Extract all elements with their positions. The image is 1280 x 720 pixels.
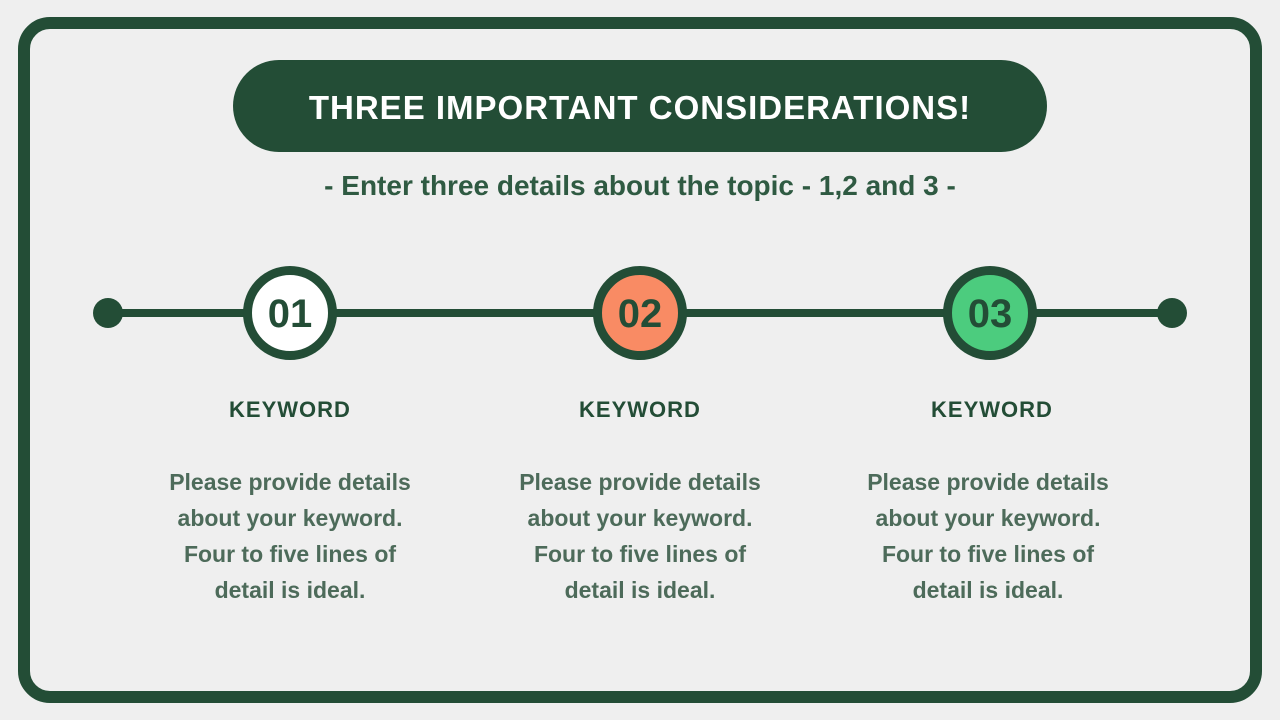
text 1: about your keyword. bbox=[178, 505, 402, 531]
step 02 circle bbox=[593, 266, 687, 360]
text 2: Four to five lines of bbox=[534, 541, 746, 567]
title bbox=[233, 60, 1047, 152]
step 01 circle bbox=[243, 266, 337, 360]
text 2: Please provide details bbox=[519, 469, 761, 495]
step 01 circle: 01 bbox=[268, 292, 312, 336]
step 03 circle: 03 bbox=[968, 292, 1012, 336]
timeline start dot bbox=[93, 298, 123, 328]
subtitle: - Enter three details about the topic - 1,2 and 3 - bbox=[324, 170, 956, 201]
timeline line bbox=[108, 309, 1172, 317]
timeline end dot bbox=[1157, 298, 1187, 328]
keyword 3: KEYWORD bbox=[931, 397, 1053, 422]
step 03 circle bbox=[943, 266, 1037, 360]
text 3: Please provide details bbox=[867, 469, 1109, 495]
text 3: Four to five lines of bbox=[882, 541, 1094, 567]
text 3 bbox=[867, 469, 1109, 603]
title: THREE IMPORTANT CONSIDERATIONS! bbox=[309, 89, 971, 126]
keyword 1: KEYWORD bbox=[229, 397, 351, 422]
text 3: about your keyword. bbox=[876, 505, 1100, 531]
text 1 bbox=[169, 469, 411, 603]
text 1: Please provide details bbox=[169, 469, 411, 495]
text 1: detail is ideal. bbox=[215, 577, 365, 603]
text 3: detail is ideal. bbox=[913, 577, 1063, 603]
text 2 bbox=[519, 469, 761, 603]
keyword 2: KEYWORD bbox=[579, 397, 701, 422]
step 02 circle: 02 bbox=[618, 292, 662, 336]
text 2: detail is ideal. bbox=[565, 577, 715, 603]
text 2: about your keyword. bbox=[528, 505, 752, 531]
text 1: Four to five lines of bbox=[184, 541, 396, 567]
